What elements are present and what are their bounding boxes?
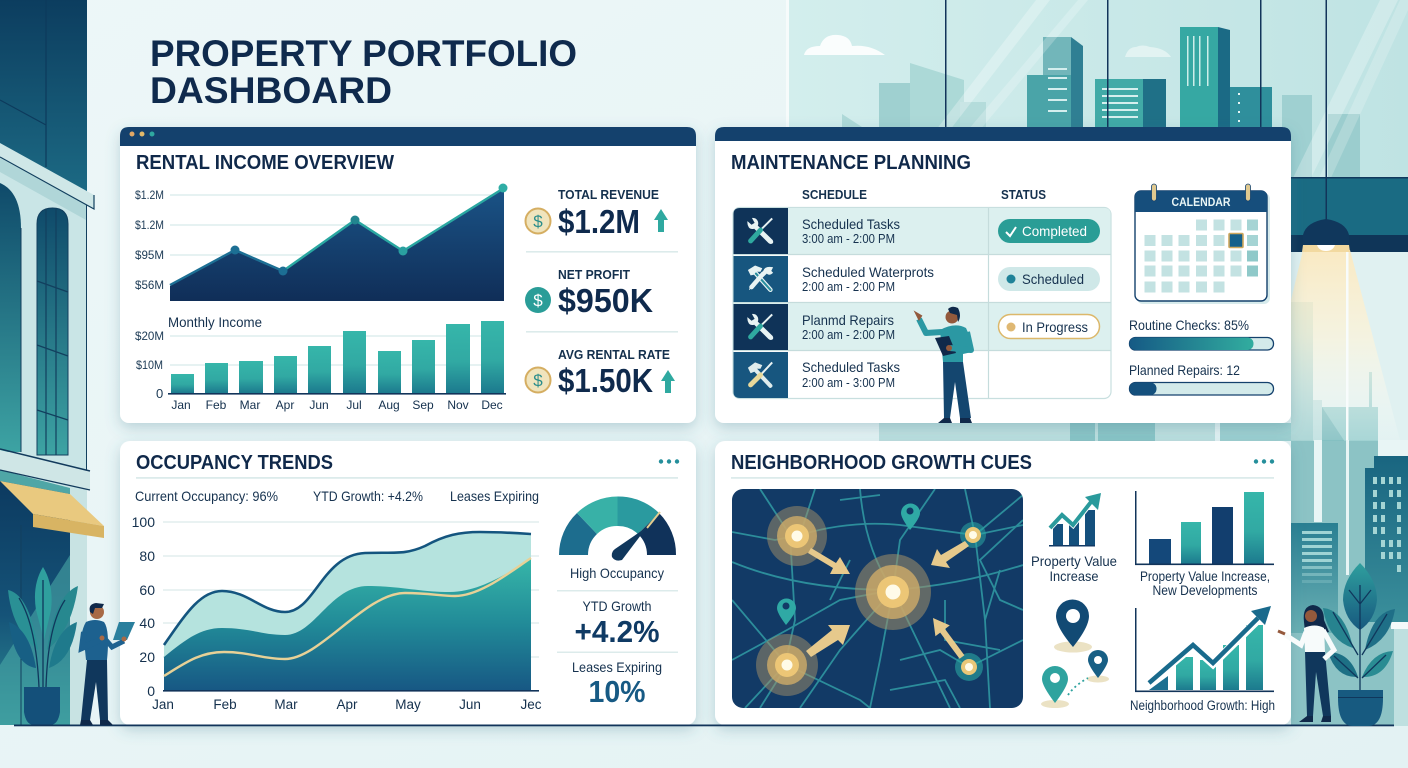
area chart: occupancy: Jec [520, 697, 542, 712]
heading: MAINTENANCE PLANNING [731, 152, 971, 174]
area chart: occupancy: Jun [459, 697, 481, 712]
menu dots [1254, 459, 1274, 464]
title: DASHBOARD [150, 70, 392, 111]
stat line: Leases Expiring [450, 488, 539, 504]
person with tablet [80, 603, 135, 725]
stat: total revenue: TOTAL REVENUE [558, 187, 659, 202]
panel: rental income overview [120, 127, 696, 423]
bar chart: monthly income: Jun [309, 398, 329, 412]
stat: net profit: $ [533, 291, 543, 310]
stat line: YTD Growth: +4.2% [313, 488, 423, 504]
heading: NEIGHBORHOOD GROWTH CUES [731, 452, 1032, 474]
hotspots [756, 506, 986, 696]
bar chart: monthly income: Apr [276, 398, 294, 412]
chart: neighborhood growth: Neighborhood Growth: High [1130, 698, 1275, 713]
bar chart: monthly income: Sep [412, 398, 434, 412]
stat: average rental rate: AVG RENTAL RATE [558, 347, 670, 362]
icon: property value chart [1049, 493, 1101, 546]
heading: OCCUPANCY TRENDS [136, 452, 333, 474]
area chart: occupancy: Feb [213, 697, 237, 712]
rows text: 2:00 am - 3:00 PM [802, 376, 895, 390]
bar chart: monthly income: Mar [240, 398, 260, 412]
person gesturing, right [1278, 605, 1334, 722]
background: lower right buildings [1291, 440, 1408, 726]
stat: average rental rate [526, 347, 675, 399]
stat: average rental rate: $1.50K [558, 362, 653, 399]
rows text: Scheduled Waterprots [802, 264, 934, 280]
bar chart: monthly income [135, 314, 506, 412]
schedule table: STATUS [1001, 187, 1046, 202]
plant left [8, 567, 78, 725]
area chart: occupancy: 0 [147, 683, 155, 699]
calendar [1135, 184, 1270, 304]
area chart: occupancy: Apr [336, 697, 358, 712]
bar chart: property value [1135, 491, 1274, 598]
arrows to centre [806, 541, 969, 659]
rows text: 3:00 am - 2:00 PM [802, 232, 895, 246]
panel: occupancy trends [120, 441, 696, 725]
status pill: scheduled [998, 267, 1100, 291]
area chart: $56M [135, 278, 164, 292]
background: city window scene [786, 0, 1408, 445]
stat: total revenue [526, 187, 668, 240]
status pill: in progress: In Progress [1022, 319, 1088, 335]
stat line: Current Occupancy: 96% [135, 488, 278, 504]
schedule table: SCHEDULE [802, 187, 867, 202]
area chart: occupancy: 100 [132, 514, 155, 530]
progress: routine checks [1129, 317, 1274, 350]
ground line [14, 724, 1394, 726]
background: left building [0, 0, 104, 725]
heading: RENTAL INCOME OVERVIEW [136, 152, 394, 174]
chart: neighborhood growth [1130, 606, 1275, 713]
progress: routine checks: Routine Checks: 85% [1129, 317, 1249, 333]
area chart: occupancy: 80 [139, 548, 155, 564]
area chart [135, 184, 508, 301]
window title bar [120, 127, 696, 146]
rows text: 2:00 am - 2:00 PM [802, 280, 895, 294]
calendar: CALENDAR [1172, 195, 1231, 209]
area chart: $95M [135, 248, 164, 262]
stat: ytd growth: YTD Growth [582, 598, 652, 614]
area chart: occupancy: 60 [139, 582, 155, 598]
stat: total revenue: $ [533, 212, 543, 231]
bar chart: monthly income: Nov [447, 398, 469, 412]
rows text [802, 216, 934, 390]
bar chart: monthly income: $20M [135, 329, 164, 343]
bar chart: property value: New Developments [1152, 583, 1258, 598]
stat: net profit [525, 267, 653, 319]
bar chart: monthly income: Feb [206, 398, 227, 412]
stat: ytd growth [574, 598, 660, 649]
area chart: $1.2M [135, 218, 164, 232]
icon: hammer and screwdriver [748, 362, 772, 386]
schedule table [733, 187, 1111, 398]
label: property value increase: Property Value [1031, 553, 1117, 569]
status pill: completed: Completed [1022, 223, 1087, 239]
person with clipboard [916, 307, 972, 423]
rows text: Scheduled Tasks [802, 216, 900, 232]
area chart: occupancy: Jan [152, 697, 174, 712]
status pill: completed [998, 219, 1100, 243]
area chart: occupancy: 20 [139, 649, 155, 665]
menu dots [659, 459, 679, 464]
progress: planned repairs: Planned Repairs: 12 [1129, 362, 1240, 378]
bar chart: monthly income: 0 [156, 386, 163, 401]
status pill: scheduled: Scheduled [1022, 271, 1084, 287]
icon: location pins [1041, 600, 1109, 708]
panel: maintenance planning [715, 127, 1291, 423]
stat: total revenue: $1.2M [558, 203, 640, 240]
icon: wrench and screwdriver, row three [747, 314, 773, 340]
title: PROPERTY PORTFOLIO [150, 33, 577, 74]
stat: leases expiring: 10% [588, 674, 646, 709]
area chart: occupancy: Mar [274, 697, 298, 712]
label: property value increase: Increase [1050, 568, 1099, 584]
area chart: occupancy: 40 [139, 615, 155, 631]
stat: ytd growth: +4.2% [574, 614, 660, 649]
area chart: occupancy: May [395, 697, 421, 712]
icon: hammer and wrench [748, 266, 773, 290]
panel: neighborhood growth cues [715, 441, 1291, 725]
bar chart: monthly income: $10M [136, 358, 163, 372]
area chart: $1.2M [135, 188, 164, 202]
rows text: Planmd Repairs [802, 312, 894, 328]
rows text: Scheduled Tasks [802, 359, 900, 375]
title [150, 33, 577, 111]
gauge: high occupancy: High Occupancy [570, 565, 664, 581]
status pill: in progress [998, 314, 1100, 338]
gauge: high occupancy [559, 496, 676, 581]
bar chart: monthly income: Dec [481, 398, 503, 412]
rows text: 2:00 am - 2:00 PM [802, 328, 895, 342]
stat: net profit: NET PROFIT [558, 267, 630, 282]
hanging lamp with light beam [1291, 219, 1400, 442]
plant right [1323, 563, 1395, 726]
map pins [777, 504, 920, 625]
map [732, 489, 1023, 708]
stat: leases expiring: Leases Expiring [572, 659, 662, 675]
bar chart: monthly income: Monthly Income [168, 314, 262, 330]
bar chart: property value: Property Value Increase, [1140, 569, 1270, 584]
stat line [135, 488, 539, 504]
stat: leases expiring [572, 659, 662, 709]
label: property value increase [1031, 553, 1117, 584]
progress: planned repairs [1129, 362, 1274, 395]
stat: average rental rate: $ [533, 371, 543, 390]
bar chart: monthly income: Jan [171, 398, 191, 412]
icon: wrench and screwdriver [747, 218, 773, 244]
area chart: occupancy [132, 514, 542, 712]
stat: net profit: $950K [558, 282, 653, 319]
bar chart: monthly income: Jul [346, 398, 362, 412]
bar chart: monthly income: Aug [378, 398, 400, 412]
